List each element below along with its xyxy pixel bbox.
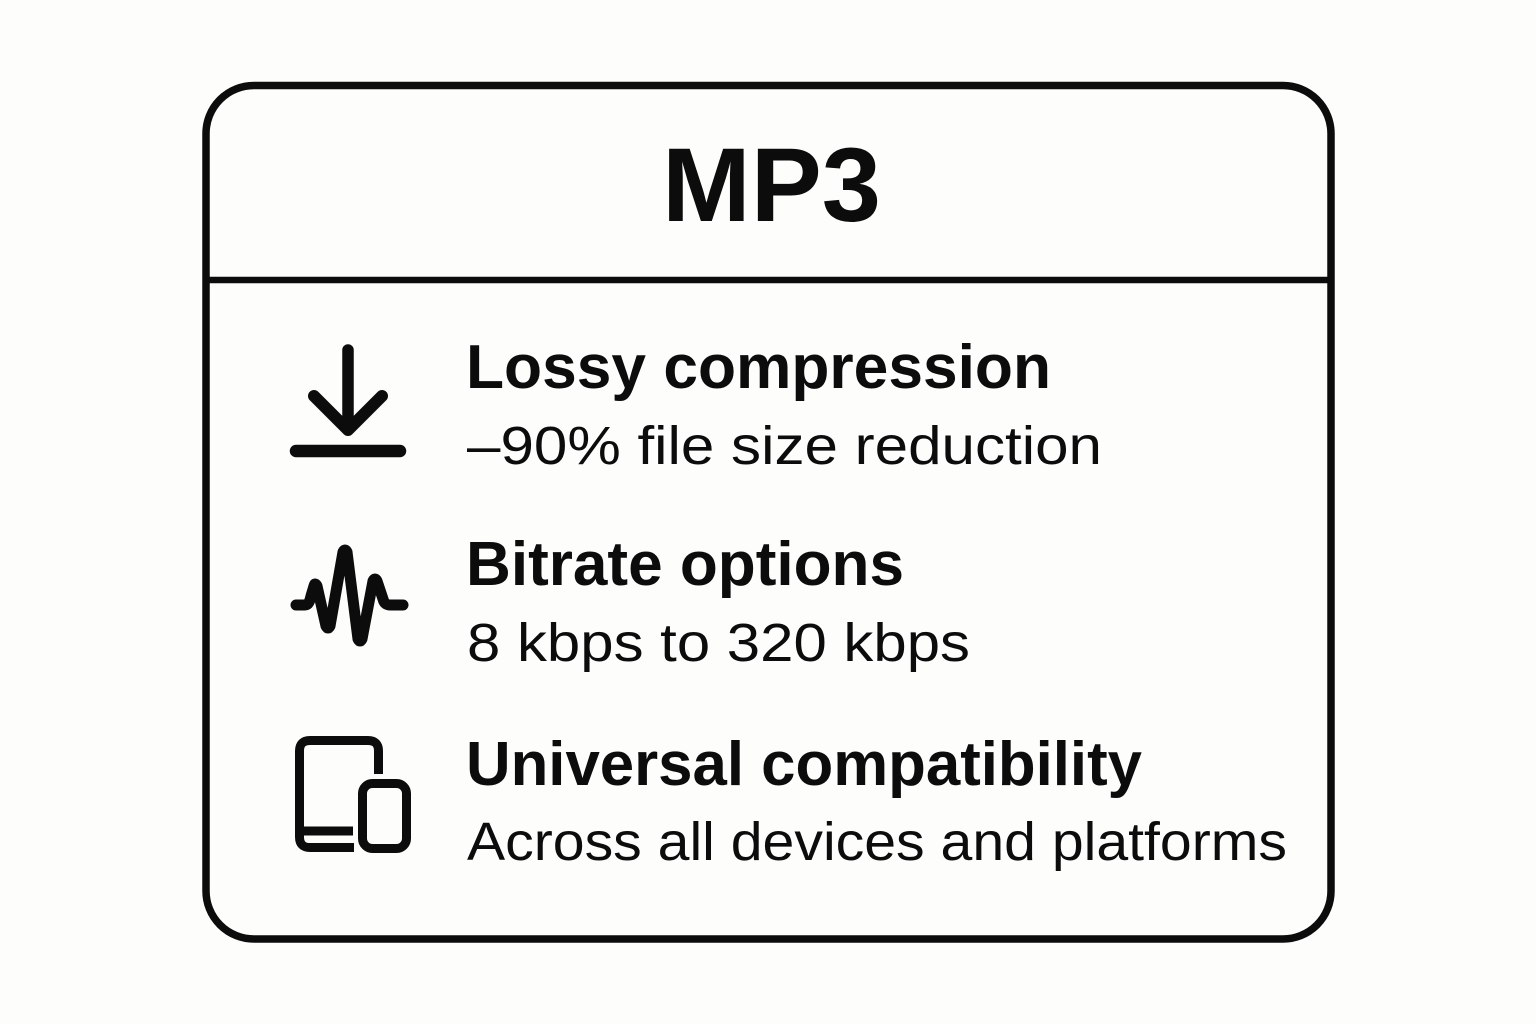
row: bitrate options (296, 530, 970, 673)
text: file size reduction: –90% file size reduction (467, 416, 1102, 476)
text: device coverage: Across all devices and platforms (467, 812, 1287, 872)
icon: waveform (296, 550, 403, 641)
icon: download arrow (296, 350, 400, 451)
panel: MP3 card (206, 86, 1331, 939)
heading: universal compatibility: Universal compatibility (466, 730, 1143, 799)
heading: bitrate options: Bitrate options (466, 530, 904, 599)
row: universal compatibility (300, 730, 1287, 872)
icon: tablet and phone (300, 740, 406, 848)
title: MP3 (662, 127, 881, 244)
row: lossy compression (296, 333, 1102, 476)
heading: lossy compression: Lossy compression (466, 333, 1051, 402)
text: bitrate range: 8 kbps to 320 kbps (467, 613, 970, 673)
